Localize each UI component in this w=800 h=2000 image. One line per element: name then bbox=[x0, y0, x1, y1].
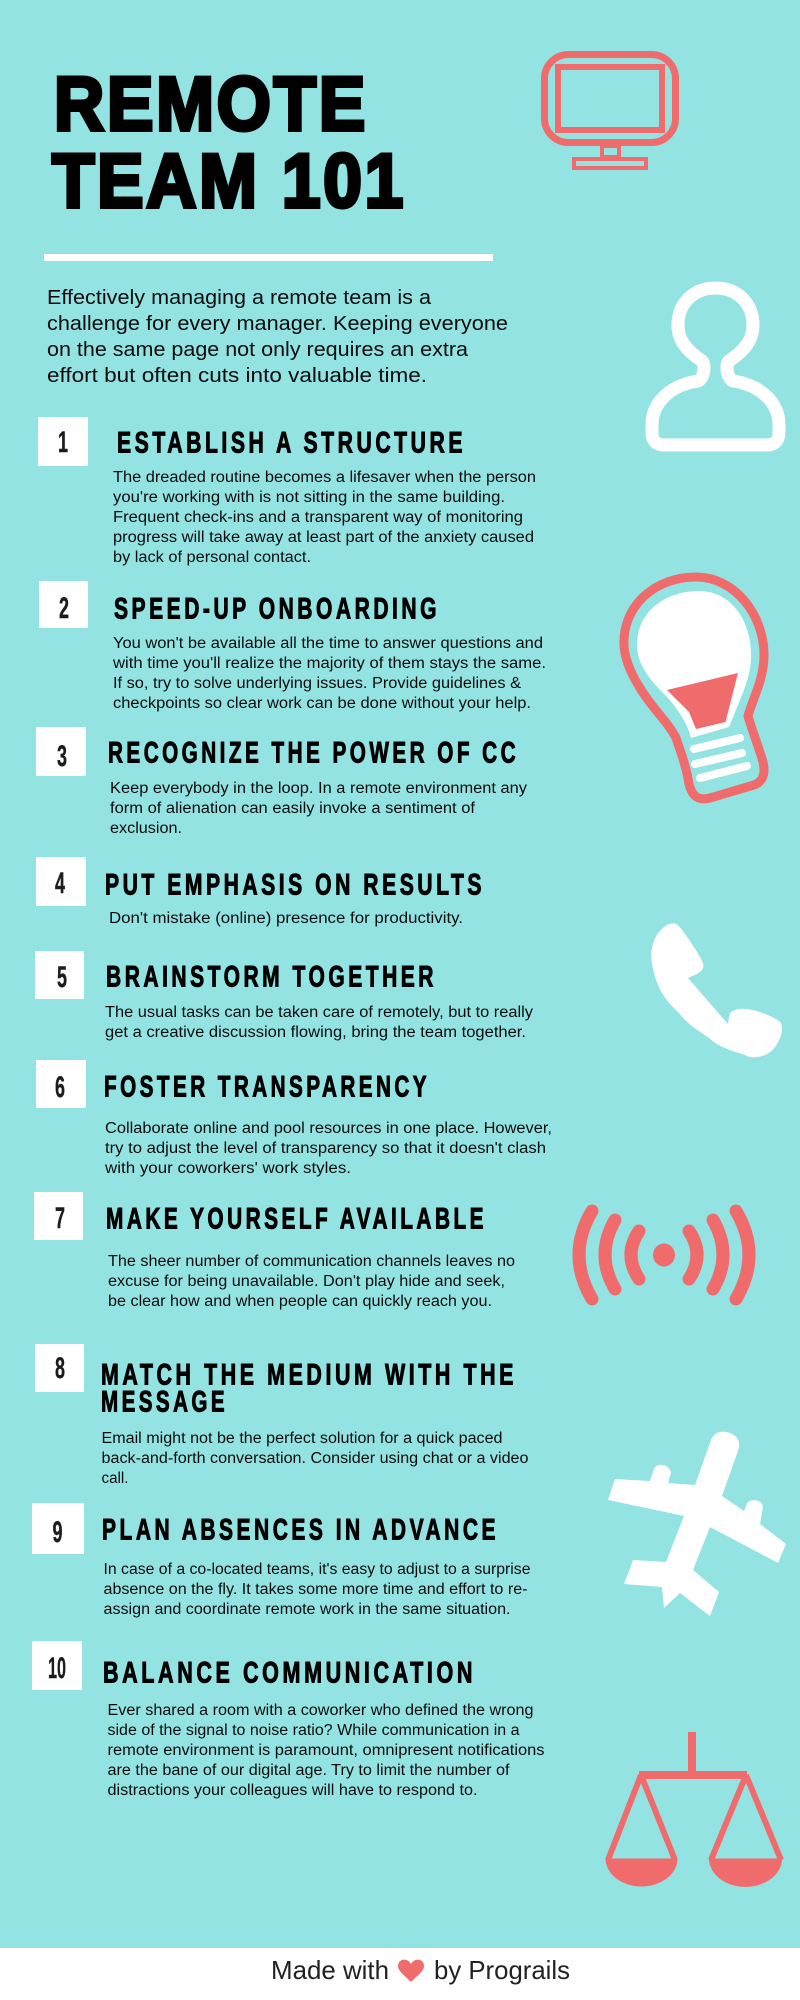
section 9: PLAN ABSENCES IN ADVANCE bbox=[102, 1514, 499, 1546]
section 3 bbox=[36, 727, 527, 837]
section 2: If so, try to solve underlying issues. Provide guidelines & bbox=[113, 675, 522, 692]
section 2: You won't be available all the time to answer questions and bbox=[113, 635, 543, 652]
section 6 bbox=[36, 1060, 552, 1177]
section 1: by lack of personal contact. bbox=[113, 549, 311, 566]
section 3: Keep everybody in the loop. In a remote environment any bbox=[110, 780, 527, 797]
section 7: excuse for being unavailable. Don't play hide and seek, bbox=[108, 1273, 505, 1290]
section 2: 2 bbox=[59, 592, 69, 625]
section 1: you're working with is not sitting in the same building. bbox=[113, 489, 505, 506]
section 10: BALANCE COMMUNICATION bbox=[103, 1656, 476, 1690]
intro text: on the same page not only requires an extra bbox=[47, 339, 469, 361]
section 9: 9 bbox=[52, 1516, 62, 1549]
footer bbox=[0, 1948, 800, 2000]
section 1: 1 bbox=[58, 426, 68, 459]
title: TEAM 101 bbox=[52, 139, 406, 224]
section 10: side of the signal to noise ratio? While communication in a bbox=[108, 1722, 520, 1739]
title bbox=[52, 62, 406, 224]
section 1: progress will take away at least part of the anxiety caused bbox=[113, 529, 534, 546]
section 8: MESSAGE bbox=[101, 1386, 228, 1418]
section 2: with time you'll realize the majority of them stays the same. bbox=[112, 655, 546, 672]
section 8: back-and-forth conversation. Consider using chat or a video bbox=[102, 1450, 528, 1467]
section 8: Email might not be the perfect solution for a quick paced bbox=[102, 1430, 502, 1447]
intro text: effort but often cuts into valuable time. bbox=[47, 365, 427, 387]
intro text: Effectively managing a remote team is a bbox=[47, 287, 432, 309]
icon: scales bbox=[606, 1732, 782, 1887]
section 9 bbox=[32, 1503, 530, 1618]
section 7: 7 bbox=[55, 1202, 65, 1235]
section 7: MAKE YOURSELF AVAILABLE bbox=[106, 1202, 487, 1236]
footer: Made with bbox=[271, 1955, 389, 1985]
section 6: 6 bbox=[55, 1071, 65, 1104]
section 8: call. bbox=[102, 1470, 128, 1487]
section 9: In case of a co-located teams, it's easy to adjust to a surprise bbox=[104, 1561, 530, 1578]
icon: phone bbox=[651, 923, 782, 1057]
section 3: form of alienation can easily invoke a sentiment of bbox=[110, 800, 476, 817]
section 10 bbox=[32, 1641, 545, 1799]
section 6: FOSTER TRANSPARENCY bbox=[104, 1070, 430, 1104]
section 4: 4 bbox=[55, 867, 65, 900]
icon: light bulb bbox=[624, 577, 764, 799]
section 1: ESTABLISH A STRUCTURE bbox=[117, 426, 466, 460]
section 4: PUT EMPHASIS ON RESULTS bbox=[105, 868, 485, 902]
section 10: distractions your colleagues will have to respond to. bbox=[108, 1782, 478, 1799]
section 3: exclusion. bbox=[110, 820, 182, 837]
icon: monitor bbox=[544, 54, 676, 168]
section 5: BRAINSTORM TOGETHER bbox=[106, 960, 437, 994]
intro text bbox=[47, 287, 508, 387]
section 3: 3 bbox=[57, 740, 67, 773]
section 7 bbox=[34, 1192, 515, 1310]
section 2: SPEED-UP ONBOARDING bbox=[114, 592, 440, 626]
title: REMOTE bbox=[54, 62, 368, 147]
section 10: 10 bbox=[48, 1652, 66, 1685]
section 2 bbox=[39, 581, 546, 712]
section 6: try to adjust the level of transparency so that it doesn't clash bbox=[105, 1140, 546, 1157]
section 7: be clear how and when people can quickly reach you. bbox=[108, 1293, 492, 1310]
section 4 bbox=[36, 857, 485, 927]
section 5: The usual tasks can be taken care of remotely, but to really bbox=[105, 1004, 533, 1021]
section 1: Frequent check-ins and a transparent way of monitoring bbox=[113, 509, 523, 526]
section 10: Ever shared a room with a coworker who defined the wrong bbox=[108, 1702, 534, 1719]
section 5: get a creative discussion flowing, bring the team together. bbox=[105, 1024, 526, 1041]
section 6: with your coworkers' work styles. bbox=[104, 1160, 351, 1177]
section 6: Collaborate online and pool resources in one place. However, bbox=[105, 1120, 552, 1137]
section 5 bbox=[35, 951, 533, 1041]
section 8: MATCH THE MEDIUM WITH THE bbox=[101, 1358, 517, 1392]
footer: by Prograils bbox=[434, 1955, 570, 1985]
icon: airplane bbox=[608, 1432, 786, 1616]
intro text: challenge for every manager. Keeping everyone bbox=[47, 313, 508, 335]
section 2: checkpoints so clear work can be done without your help. bbox=[113, 695, 531, 712]
section 1: The dreaded routine becomes a lifesaver when the person bbox=[113, 469, 536, 486]
section 8 bbox=[35, 1344, 528, 1487]
section 3: RECOGNIZE THE POWER OF CC bbox=[108, 736, 519, 770]
section 10: are the bane of our digital age. Try to limit the number of bbox=[108, 1762, 510, 1779]
section 9: assign and coordinate remote work in the same situation. bbox=[104, 1601, 510, 1618]
icon: person bbox=[652, 288, 779, 445]
section 7: The sheer number of communication channels leaves no bbox=[108, 1253, 515, 1270]
section 8: 8 bbox=[55, 1352, 65, 1385]
section 9: absence on the fly. It takes some more time and effort to re- bbox=[104, 1581, 528, 1598]
section 10: remote environment is paramount, omnipresent notifications bbox=[108, 1742, 545, 1759]
section 5: 5 bbox=[57, 961, 67, 994]
section 4: Don't mistake (online) presence for productivity. bbox=[109, 910, 463, 927]
icon: signal bbox=[579, 1211, 749, 1299]
section 1 bbox=[38, 417, 536, 566]
